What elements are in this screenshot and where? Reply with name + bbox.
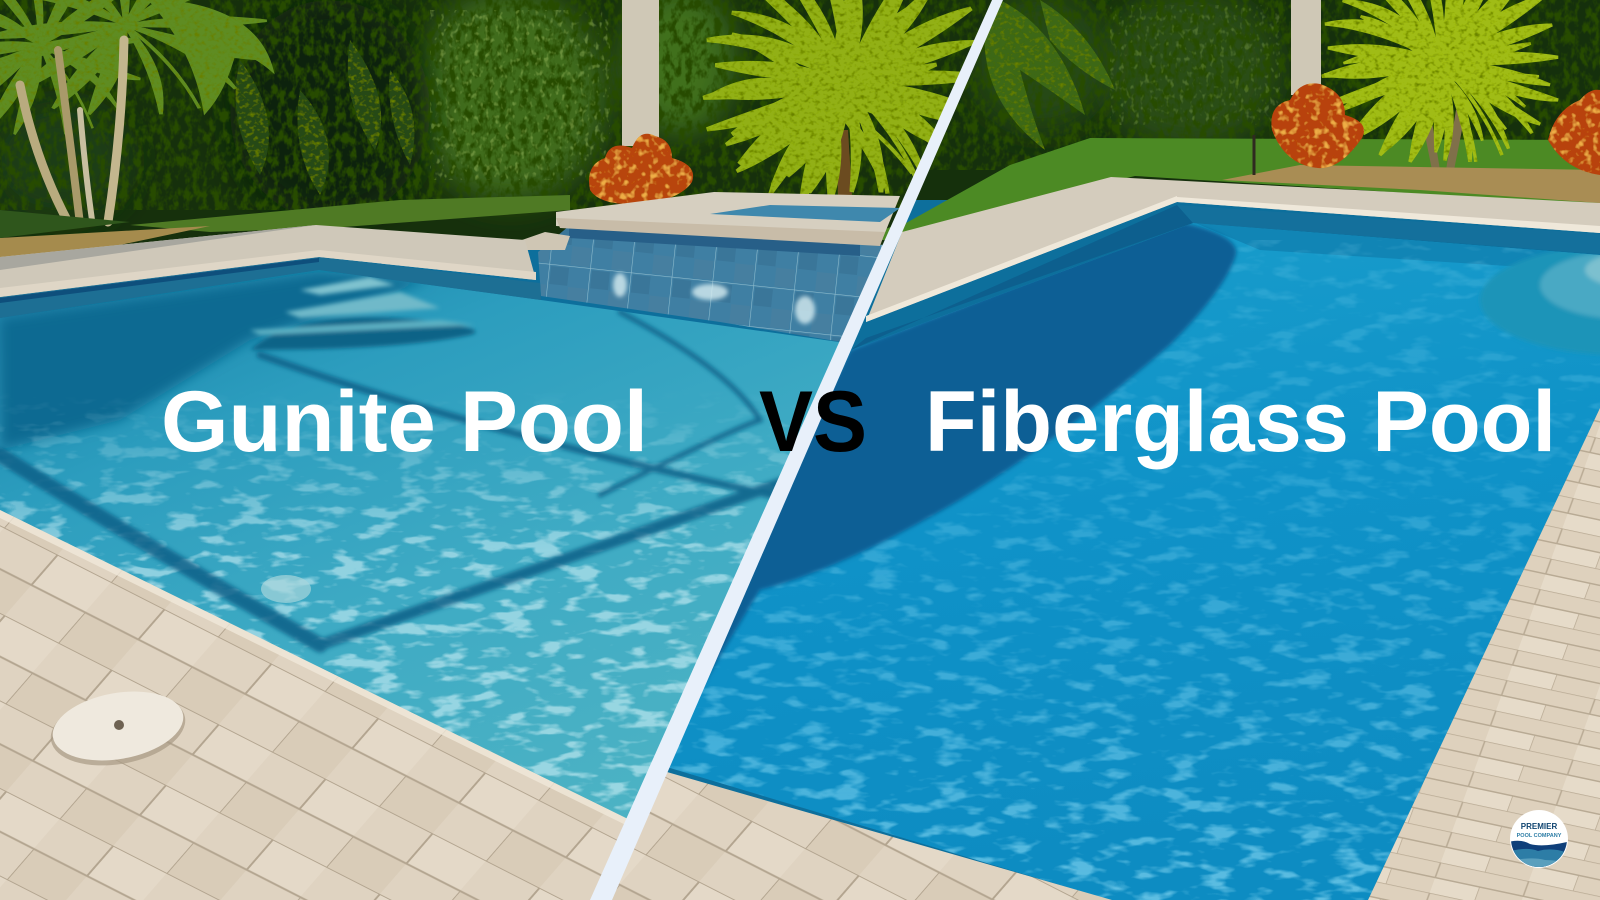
pool water, fiberglass [620,220,1600,900]
mulch bed [1222,165,1600,203]
title: vs: VS [759,374,867,470]
steps in water [250,277,476,350]
long dark shadow in water [706,223,1238,684]
steps, right pool [1480,245,1600,355]
orange croton plant [589,134,693,204]
yellow green palm [702,0,974,195]
bottom pavers [600,770,1112,900]
screen cage shadows [0,312,790,645]
grass behind spa [882,226,891,240]
lawn and mulch [0,195,570,258]
coping, left pool [0,225,536,297]
pool water, gunite [0,270,840,818]
croton plants, right [1271,83,1600,175]
dark hanging fronds [236,40,414,195]
spa coping [522,192,900,250]
centre palm trunk, right [1291,0,1321,95]
tile band, left pool [0,257,541,318]
diagonal divider [590,0,1003,900]
foreground pavers, left [0,510,640,900]
logo: premier pool company: PREMIER [1521,822,1557,831]
panel: gunite pool photo [0,0,1000,900]
tropical foliage background [0,0,1000,250]
centre palm trunk [622,0,659,146]
yellow green palm, right [1321,0,1559,168]
garden light [1252,135,1256,175]
coping and deck, right pool [866,177,1600,322]
dark palm fronds, right [985,0,1115,150]
palm fronds, left group [0,0,272,134]
tile band, right pool [852,205,1255,350]
palm trunks, left group [20,40,124,224]
title: gunite pool: Gunite Pool [161,374,648,470]
skimmer lid [50,692,186,766]
title: fiberglass pool: Fiberglass Pool [925,374,1556,470]
tropical foliage background [880,0,1600,200]
spa tile wall [538,226,885,345]
logo: premier pool company [1510,810,1568,868]
logo: premier pool company: POOL COMPANY [1517,833,1562,839]
right side pavers [1368,408,1600,900]
lawn [890,138,1600,232]
panel: fiberglass pool photo [600,0,1600,900]
